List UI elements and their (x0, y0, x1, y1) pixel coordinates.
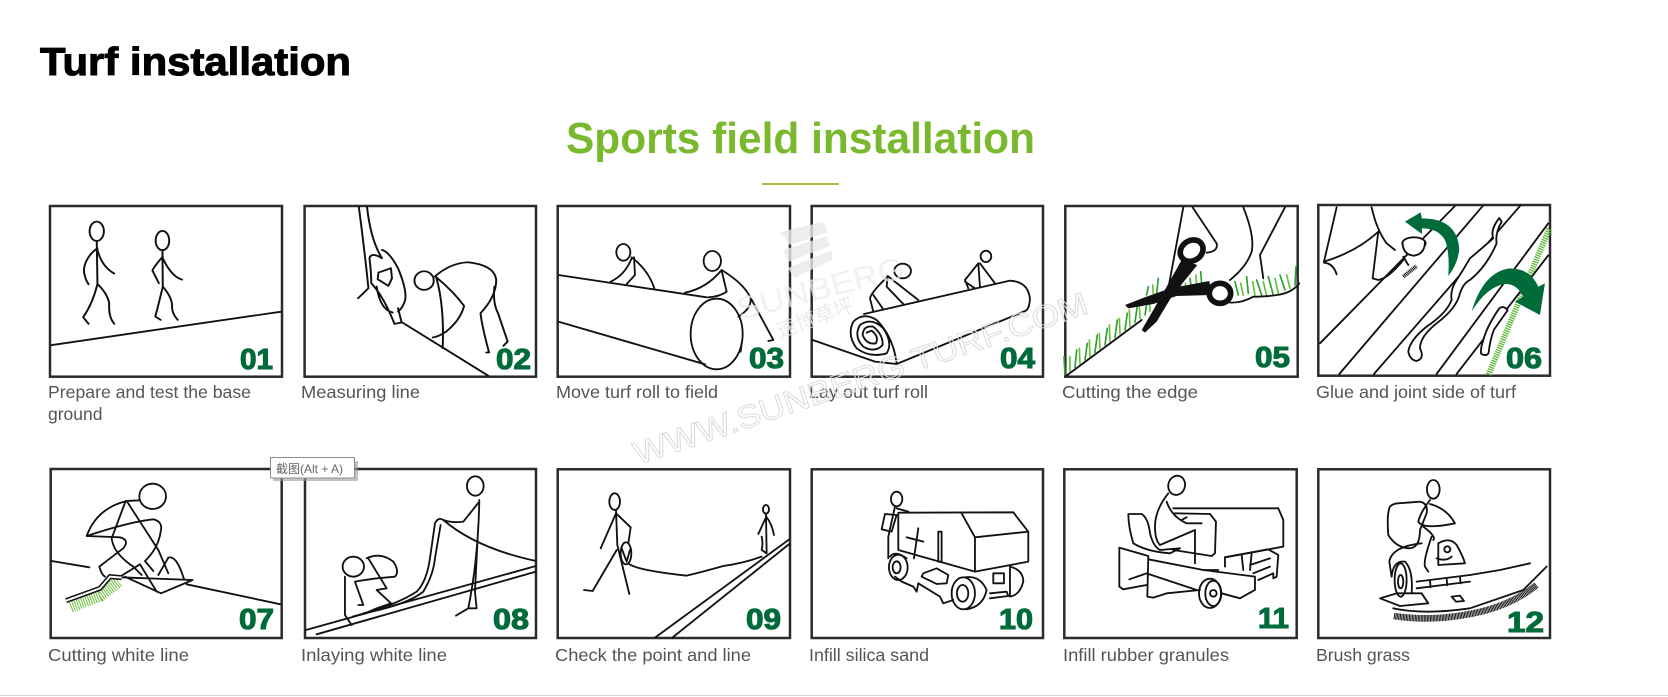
caption 07: Cutting white line (48, 645, 189, 665)
caption 02: Measuring line (301, 382, 420, 402)
caption 10: Infill silica sand (809, 645, 929, 665)
step number 09: 09 (746, 604, 781, 636)
glue lines (1408, 218, 1508, 361)
step number 04: 04 (1000, 343, 1035, 375)
panel 09: check point and line (555, 469, 790, 665)
illustration: gluing turf seams (1320, 205, 1549, 375)
panel 04: lay out turf roll (809, 206, 1043, 402)
watermark logo (780, 222, 832, 278)
illustration: scissors cutting grass edge (1064, 207, 1299, 376)
scissors (1125, 236, 1231, 333)
illustration: two people walking on base ground (51, 222, 282, 345)
panel 07: cutting white line (48, 469, 282, 665)
frame 11 (1064, 469, 1297, 638)
page title: Turf installation (40, 41, 351, 84)
panel 12: brush grass (1316, 469, 1550, 665)
panel 06: glue and joint (1316, 205, 1550, 402)
watermark Chinese name: 速博草坪 (774, 294, 857, 343)
illustration: people inlaying white line (306, 476, 536, 634)
caption 04: Lay out turf roll (809, 382, 928, 402)
step number 02: 02 (496, 344, 531, 376)
caption 05: Cutting the edge (1062, 382, 1198, 402)
frame 10 (812, 469, 1043, 638)
watermark brand name: SUNBERG (733, 250, 908, 327)
caption 03: Move turf roll to field (556, 382, 718, 402)
frame 02 (305, 206, 536, 377)
illustration: two people checking line with tape (584, 493, 789, 638)
watermark: logo and website (629, 222, 1092, 472)
illustration: brushing machine (1380, 480, 1547, 618)
panel 01: prepare and test (48, 206, 282, 424)
step number 05: 05 (1255, 342, 1290, 374)
caption 09: Check the point and line (555, 645, 751, 665)
step number 11: 11 (1258, 603, 1289, 635)
section heading: Sports field installation (566, 114, 1035, 163)
step number 03: 03 (749, 343, 784, 375)
panel 03: move turf roll (556, 206, 790, 402)
step number 01: 01 (240, 344, 273, 376)
panel 08: inlaying white line (301, 469, 536, 665)
panel 11: infill rubber granules (1063, 469, 1297, 665)
frame 09 (558, 469, 790, 638)
step number 07: 07 (239, 604, 274, 636)
illustration: people pushing turf roll (558, 244, 773, 369)
glue roller (1402, 237, 1426, 265)
frame 01 (50, 206, 282, 377)
frame 12 (1318, 469, 1550, 638)
panel 10: infill silica sand (809, 469, 1043, 665)
frame 08 (305, 469, 536, 638)
caption 11: Infill rubber granules (1063, 645, 1229, 665)
illustration: two people measuring line (358, 207, 508, 376)
illustration: rubber infill machine (1119, 474, 1283, 608)
step number 10: 10 (999, 604, 1033, 636)
green arrow right (1472, 268, 1545, 315)
heading underline (762, 183, 839, 185)
caption 01: Prepare and test the base (48, 382, 251, 402)
green arrow left (1405, 212, 1459, 276)
step number 12: 12 (1507, 607, 1544, 639)
watermark website: WWW.SUNBERG TURF.COM (629, 285, 1092, 472)
grass edge (1489, 229, 1549, 375)
step number 08: 08 (493, 604, 529, 636)
frame 05 (1065, 206, 1298, 377)
frame 06 (1318, 205, 1550, 376)
step number 06: 06 (1506, 343, 1542, 375)
caption 06: Glue and joint side of turf (1316, 382, 1516, 402)
frame 04 (812, 206, 1043, 377)
panel 05: cutting the edge (1062, 206, 1299, 402)
frame 03 (558, 206, 790, 377)
panel 02: measuring line (301, 206, 536, 402)
illustration: sand infill machine (882, 492, 1028, 609)
caption 12: Brush grass (1316, 645, 1410, 665)
illustration: unrolling turf (813, 251, 1030, 364)
grass strip (1064, 267, 1296, 375)
bottom divider (0, 695, 1668, 696)
screenshot tooltip: 截图(Alt + A) (276, 462, 343, 476)
caption 01: ground (48, 404, 102, 424)
caption 08: Inlaying white line (301, 645, 447, 665)
illustration: person cutting white line (52, 484, 281, 607)
screenshot tooltip (270, 458, 358, 481)
frame 07 (51, 469, 282, 638)
